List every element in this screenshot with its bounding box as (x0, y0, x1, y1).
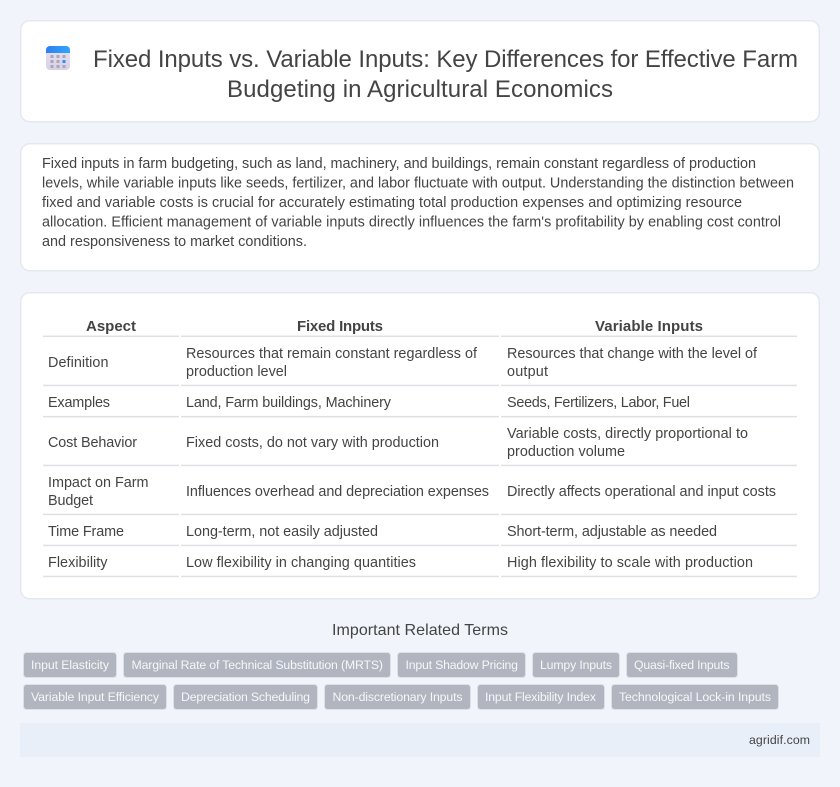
text block: summary paragraph: levels, while variable inputs like seeds, fertilizer, and labor fluctuate with output. Understanding the distinction between (42, 176, 794, 192)
row: cost behavior: Variable costs, directly proportional to (507, 426, 748, 442)
tag (24, 652, 116, 678)
row: examples: Land, Farm buildings, Machinery (186, 395, 392, 411)
tag (24, 684, 166, 710)
row: time frame: Long-term, not easily adjusted (186, 524, 378, 540)
row: time frame (43, 524, 797, 546)
tag: Depreciation Scheduling (181, 690, 310, 704)
table header: Variable Inputs (595, 318, 703, 335)
tag: Input Elasticity (31, 658, 110, 672)
tag: Variable Input Efficiency (31, 690, 160, 704)
row: impact on farm budget: Directly affects operational and input costs (507, 484, 776, 500)
tag: Lumpy Inputs (540, 658, 612, 672)
row: definition (43, 346, 797, 386)
row: time frame: Time Frame (48, 524, 124, 540)
text block: summary paragraph: fixed and variable costs is crucial for accurately estimating total production expenses and optimizing resource (42, 195, 742, 211)
text block: summary paragraph: Fixed inputs in farm budgeting, such as land, machinery, and buildings, remain constant regardless of production (42, 156, 756, 172)
row: cost behavior (43, 426, 797, 466)
tag: Quasi-fixed Inputs (634, 658, 730, 672)
footer (20, 723, 820, 757)
row: impact on farm budget: Impact on Farm (48, 475, 148, 491)
tag: Marginal Rate of Technical Substitution (MRTS) (132, 658, 383, 672)
table header (43, 318, 797, 337)
tag (612, 684, 778, 710)
row: impact on farm budget (43, 475, 797, 515)
tag (174, 684, 318, 710)
panel: summary (21, 144, 819, 271)
row: flexibility: High flexibility to scale with production (507, 555, 753, 571)
panel: comparison table (21, 293, 819, 599)
tag (532, 652, 620, 678)
row: definition: output (507, 364, 548, 380)
row: definition: Definition (48, 355, 108, 371)
tag (398, 652, 526, 678)
row: impact on farm budget: Budget (48, 493, 93, 509)
table header: Fixed Inputs (297, 318, 383, 335)
text block: summary paragraph: and responsiveness to market conditions. (42, 234, 307, 250)
row: examples: Seeds, Fertilizers, Labor, Fuel (507, 395, 690, 411)
row: impact on farm budget: Influences overhead and depreciation expenses (186, 484, 489, 500)
text block: summary paragraph: allocation. Efficient management of variable inputs directly influences the farm's profitability by enabling cost control (42, 214, 781, 230)
tags: related terms (24, 652, 778, 710)
row: flexibility (43, 555, 797, 577)
footer: agridif.com (749, 733, 810, 747)
row: flexibility: Flexibility (48, 555, 108, 571)
tag: Technological Lock-in Inputs (619, 690, 771, 704)
row: definition: production level (186, 364, 287, 380)
tag: Input Flexibility Index (485, 690, 597, 704)
row: flexibility: Low flexibility in changing quantities (186, 555, 416, 571)
heading: important related terms: Important Related Terms (332, 622, 508, 639)
tag: Input Shadow Pricing (406, 658, 518, 672)
tag: Non-discretionary Inputs (332, 690, 462, 704)
row: cost behavior: production volume (507, 444, 625, 460)
icon: calendar (46, 46, 70, 70)
table header: Aspect (86, 318, 136, 335)
tag (124, 652, 390, 678)
heading: Fixed Inputs vs. Variable Inputs: Key Differences for Effective Farm (93, 46, 798, 73)
panel: title (21, 21, 819, 122)
heading (93, 46, 798, 103)
tag (478, 684, 604, 710)
row: definition: Resources that remain constant regardless of (186, 346, 478, 362)
row: examples: Examples (48, 395, 110, 411)
row: cost behavior: Cost Behavior (48, 435, 137, 451)
row: time frame: Short-term, adjustable as needed (507, 524, 717, 540)
row: cost behavior: Fixed costs, do not vary with production (186, 435, 439, 451)
tag (324, 684, 470, 710)
heading: Budgeting in Agricultural Economics (227, 76, 613, 103)
row: definition: Resources that change with the level of (507, 346, 758, 362)
text block: summary paragraph (42, 156, 794, 250)
tag (626, 652, 738, 678)
row: examples (43, 395, 797, 417)
